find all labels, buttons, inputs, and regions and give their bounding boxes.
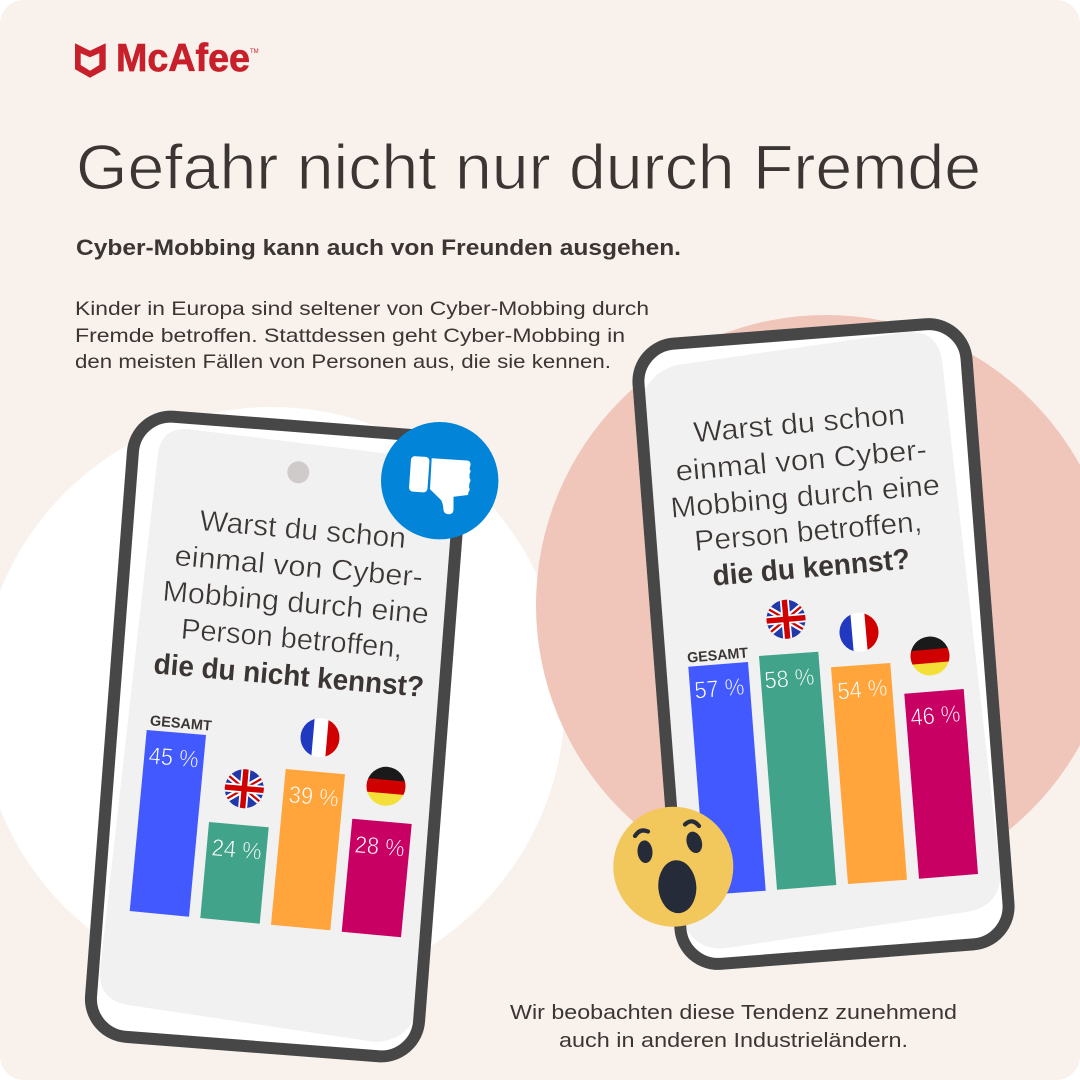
question right: Person betroffen,: [693, 506, 923, 558]
question right: Warst du schon: [692, 399, 906, 449]
intro text: Kinder in Europa sind seltener von Cyber-Mobbing durch: [75, 298, 649, 320]
value labels left: 39 %: [288, 781, 340, 813]
question left: die du nicht kennst?: [152, 648, 425, 704]
question left: Mobbing durch eine: [161, 575, 430, 631]
phone frame right: [636, 321, 1011, 967]
flag: France right: [840, 613, 878, 652]
bar: UK 24: [200, 822, 269, 924]
panel: right phone: [629, 315, 1018, 973]
bar: Germany 46: [904, 689, 978, 879]
panel: left phone: [82, 407, 470, 1066]
intro text: den meisten Fällen von Personen aus, die sie kennen.: [75, 351, 611, 373]
bar: Germany 28: [342, 819, 412, 937]
McAfee logo: McAfee: [116, 37, 250, 80]
intro text: Fremde betroffen. Stattdessen geht Cyber-Mobbing in: [75, 325, 625, 347]
footer note: auch in anderen Industrieländern.: [559, 1030, 908, 1052]
phone screen left: [100, 429, 455, 1042]
value labels right: 58 %: [763, 663, 815, 695]
question right: Mobbing durch eine: [669, 469, 941, 525]
value labels left: [148, 742, 406, 866]
intro text: [75, 298, 649, 373]
value labels left: 28 %: [354, 831, 406, 863]
flag: UK right: [766, 600, 806, 639]
value labels right: 54 %: [836, 674, 888, 706]
phone screen right: [640, 332, 1000, 948]
title: Gefahr nicht nur durch Fremde: [76, 133, 981, 203]
question left: einmal von Cyber-: [173, 540, 424, 594]
value labels right: 57 %: [693, 673, 745, 705]
flag: France left: [300, 718, 340, 757]
question right: [669, 399, 941, 593]
camera dot: [287, 461, 309, 483]
bar: France 39: [271, 769, 345, 930]
bar: UK 58: [759, 652, 836, 890]
bar: gesamt 57: [688, 662, 766, 895]
flag: Germany left: [366, 766, 406, 806]
bar: France 54: [831, 663, 907, 884]
phone body left: [82, 407, 470, 1066]
phone frame left: [88, 414, 464, 1059]
bar: gesamt 45: [130, 730, 206, 917]
gesamt label left: GESAMT: [149, 713, 213, 735]
question left: Warst du schon: [198, 505, 407, 555]
icon: thumbs down: [381, 422, 498, 539]
footer note: Wir beobachten diese Tendenz zunehmend: [510, 1002, 957, 1024]
bar chart left: [130, 713, 412, 937]
question left: Person betroffen,: [180, 613, 404, 665]
flag: UK left: [224, 769, 264, 808]
question left: [152, 505, 430, 704]
gesamt label right: GESAMT: [687, 645, 749, 667]
footer note: [510, 1002, 957, 1052]
value labels left: 24 %: [211, 834, 263, 866]
bar chart right: [687, 598, 978, 895]
question right: die du kennst?: [711, 543, 911, 593]
question right: einmal von Cyber-: [674, 434, 928, 488]
value labels right: [693, 663, 961, 732]
subtitle: Cyber-Mobbing kann auch von Freunden ausgehen.: [76, 235, 681, 260]
phone body right: [629, 315, 1018, 973]
flag: Germany right: [910, 636, 950, 676]
McAfee logo: TM: [250, 49, 259, 55]
value labels right: 46 %: [909, 700, 961, 732]
value labels left: 45 %: [148, 742, 200, 774]
icon: surprised emoji: [613, 807, 733, 927]
